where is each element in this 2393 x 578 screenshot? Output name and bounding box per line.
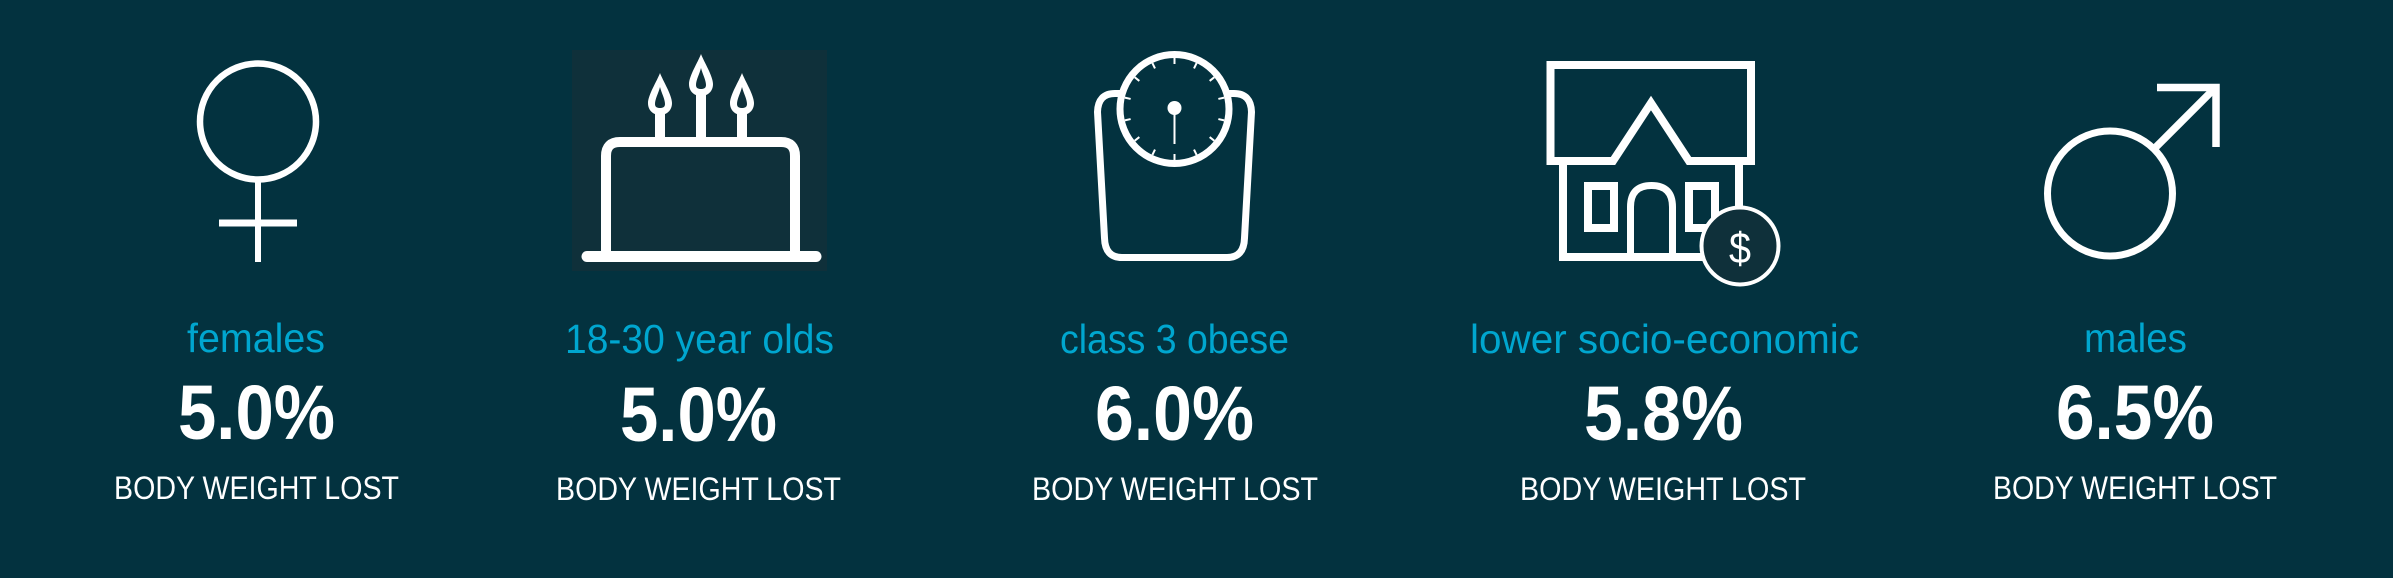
coin dollar sign: $	[1729, 224, 1751, 273]
caption: BODY WEIGHT LOST	[114, 470, 399, 506]
stat: 5.0%: 5.0%	[620, 372, 777, 458]
panel: class 3 obese	[1032, 54, 1318, 507]
panel: 18-30 year olds	[556, 50, 841, 507]
caption: BODY WEIGHT LOST	[1032, 471, 1318, 507]
stat: 6.5%: 6.5%	[2056, 370, 2214, 456]
stat: 5.0%: 5.0%	[178, 370, 335, 456]
caption: BODY WEIGHT LOST	[1520, 471, 1806, 507]
icon: male symbol	[2048, 88, 2216, 256]
panel: females	[114, 64, 399, 506]
label: class 3 obese: class 3 obese	[1060, 316, 1289, 362]
icon: weighing scale	[1098, 54, 1252, 258]
label: 18-30 year olds: 18-30 year olds	[565, 316, 834, 362]
stat: 5.8%: 5.8%	[1584, 371, 1743, 457]
panel: males	[1993, 88, 2277, 506]
panel: lower socio-economic	[1470, 65, 1859, 507]
caption: BODY WEIGHT LOST	[1993, 470, 2277, 506]
icon: female symbol	[200, 64, 316, 262]
icon: house with dollar coin	[1550, 65, 1778, 284]
label: lower socio-economic: lower socio-economic	[1470, 316, 1859, 362]
icon: birthday cake	[572, 50, 827, 271]
caption: BODY WEIGHT LOST	[556, 471, 841, 507]
label: females: females	[187, 315, 325, 361]
stat: 6.0%: 6.0%	[1095, 371, 1254, 457]
label: males: males	[2084, 315, 2187, 361]
